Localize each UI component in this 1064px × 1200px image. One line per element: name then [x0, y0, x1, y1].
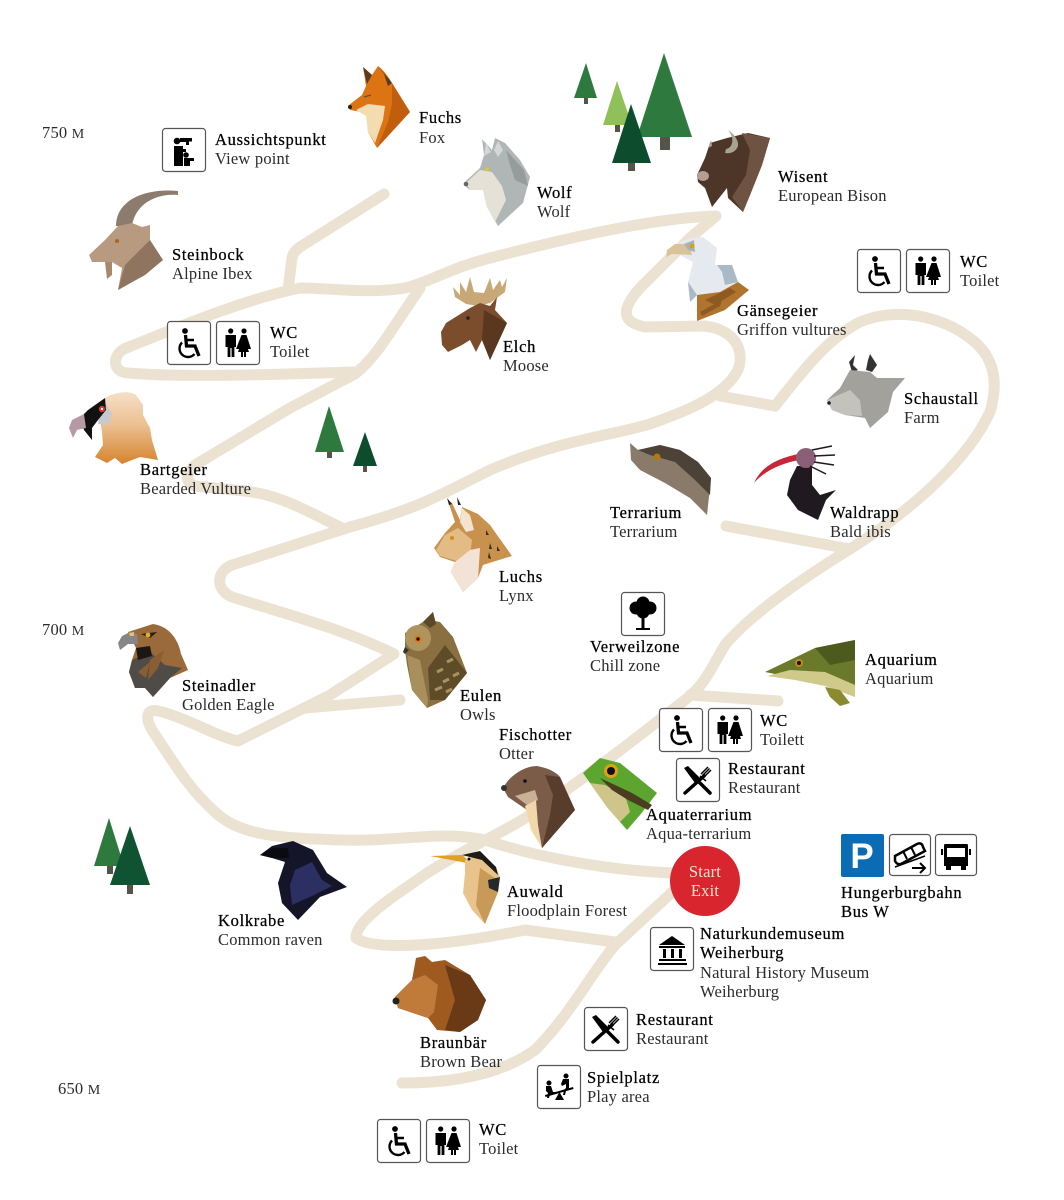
- label: Spielplatz: Spielplatz: [587, 1068, 660, 1087]
- label: WC upper left: [270, 323, 310, 361]
- label: WC middle: [760, 711, 804, 749]
- label: Steinadler: [182, 676, 275, 714]
- label: WC bottom: [479, 1120, 519, 1158]
- label: Naturkundemuseum: Natural History Museum: [700, 963, 869, 982]
- label: Wolf: Wolf: [537, 183, 572, 202]
- label: Waldrapp: Waldrapp: [830, 503, 899, 522]
- label: Luchs: Lynx: [499, 586, 534, 605]
- label: Spielplatz: [587, 1068, 660, 1106]
- label: Restaurant upper: Restaurant: [728, 759, 806, 778]
- label: Schaustall: [904, 389, 979, 427]
- label: Hungerburgbahn and bus: Bus W: [841, 902, 890, 921]
- label: Aquarium: Aquarium: [865, 669, 934, 688]
- label: WC middle: Toilett: [760, 730, 804, 749]
- label: Fuchs: [419, 108, 462, 147]
- label: Auwald: Floodplain Forest: [507, 901, 627, 920]
- label: Bartgeier: [140, 460, 251, 498]
- animal: otter: [501, 766, 575, 848]
- label: Braunbär: Brown Bear: [420, 1052, 502, 1071]
- label: Aussichtspunkt: View point: [215, 149, 290, 168]
- label: Kolkrabe: [218, 911, 323, 949]
- label: Hungerburgbahn and bus: Hungerburgbahn: [841, 883, 962, 902]
- label: WC upper left: WC: [270, 323, 298, 342]
- label: Aussichtspunkt: [215, 130, 327, 168]
- label: Elch: Moose: [503, 356, 549, 375]
- animal: bittern: [430, 851, 500, 924]
- label: Fuchs: Fox: [419, 128, 446, 147]
- label: Elch: [503, 337, 549, 375]
- animal: ibex: [89, 191, 178, 290]
- animal: bison: [697, 130, 770, 212]
- animal: griffon vulture: [666, 237, 749, 321]
- label: Naturkundemuseum: Weiherburg: [700, 943, 784, 962]
- label: Gänsegeier: [737, 301, 847, 339]
- label: Spielplatz: Play area: [587, 1087, 650, 1106]
- label: Hungerburgbahn and bus: [841, 883, 962, 921]
- label: Bartgeier: Bartgeier: [140, 460, 208, 479]
- label: WC bottom: Toilet: [479, 1139, 519, 1158]
- label: WC upper right: [960, 252, 1000, 290]
- museum icon: [650, 928, 694, 970]
- animal: viper: [630, 443, 711, 515]
- animal: raven: [260, 841, 347, 920]
- transport icons: P: [850, 837, 874, 876]
- label: Naturkundemuseum: Naturkundemuseum: [700, 924, 845, 943]
- label: Eulen: Eulen: [460, 686, 502, 705]
- label: Kolkrabe: Common raven: [218, 930, 323, 949]
- label: Naturkundemuseum: [700, 924, 869, 1001]
- restaurant icon (upper): [676, 758, 720, 802]
- label: Wisent: European Bison: [778, 186, 887, 205]
- label: Wisent: [778, 167, 887, 205]
- label: WC bottom: WC: [479, 1120, 507, 1139]
- label: Steinbock: Steinbock: [172, 245, 244, 264]
- label: Terrarium: Terrarium: [610, 522, 678, 541]
- label: Restaurant lower: [636, 1010, 714, 1048]
- chill zone icon: [622, 592, 664, 636]
- animal: lynx: [434, 497, 512, 592]
- start and exit marker: [670, 846, 740, 916]
- label: Naturkundemuseum: Weiherburg: [700, 982, 779, 1001]
- animal: bearded vulture: [69, 392, 158, 464]
- elevation labels: [42, 123, 101, 1098]
- animal: bald ibis: [754, 446, 836, 520]
- label: Elch: Elch: [503, 337, 536, 356]
- label: Steinadler: Steinadler: [182, 676, 256, 695]
- elevation labels: 700 M: [42, 620, 85, 639]
- label: Terrarium: [610, 503, 682, 541]
- animal: fox: [348, 66, 410, 148]
- label: Restaurant upper: Restaurant: [728, 778, 801, 797]
- trees: centre pair: [315, 406, 377, 472]
- label: Luchs: Luchs: [499, 567, 543, 586]
- elevation labels: 650 M: [58, 1079, 101, 1098]
- label: Waldrapp: [830, 503, 899, 541]
- label: Luchs: [499, 567, 543, 605]
- label: Eulen: Owls: [460, 705, 496, 724]
- trees: bottom-left pair: [94, 818, 150, 894]
- label: Terrarium: Terrarium: [610, 503, 682, 522]
- label: Braunbär: Braunbär: [420, 1033, 487, 1052]
- label: Fischotter: Otter: [499, 744, 534, 763]
- label: Restaurant lower: Restaurant: [636, 1010, 714, 1029]
- animal: tree frog: [583, 758, 657, 830]
- label: Gänsegeier: Griffon vultures: [737, 320, 847, 339]
- view point icon: [162, 128, 206, 172]
- label: Aquarium: [865, 650, 938, 688]
- transport icons: [841, 834, 976, 877]
- play area icon: [538, 1066, 580, 1108]
- label: Fischotter: Fischotter: [499, 725, 572, 744]
- accessible toilet icons (upper left): [168, 322, 260, 364]
- label: Bartgeier: Bearded Vulture: [140, 479, 251, 498]
- label: Wisent: Wisent: [778, 167, 828, 186]
- label: Wolf: Wolf: [537, 202, 571, 221]
- label: Auwald: Auwald: [507, 882, 563, 901]
- label: Steinbock: Alpine Ibex: [172, 264, 253, 283]
- label: Braunbär: [420, 1033, 502, 1071]
- label: Restaurant lower: Restaurant: [636, 1029, 709, 1048]
- label: WC upper right: WC: [960, 252, 988, 271]
- start and exit marker: Start: [689, 862, 721, 881]
- trees: top cluster: [574, 53, 692, 171]
- label: Aquarium: Aquarium: [865, 650, 938, 669]
- label: Verweilzone: Chill zone: [590, 656, 660, 675]
- restaurant icon (lower): [584, 1008, 628, 1050]
- label: Schaustall: Schaustall: [904, 389, 979, 408]
- label: Wolf: [537, 183, 572, 221]
- accessible toilet icons (middle): [660, 708, 752, 752]
- accessible toilet icons (upper right): [858, 250, 950, 292]
- start and exit marker: Exit: [691, 881, 719, 900]
- label: Aussichtspunkt: Aussichtspunkt: [215, 130, 327, 149]
- animal: golden eagle: [118, 624, 188, 697]
- label: Restaurant upper: [728, 759, 806, 797]
- label: WC upper right: Toilet: [960, 271, 1000, 290]
- label: Schaustall: Farm: [904, 408, 940, 427]
- label: WC upper left: Toilet: [270, 342, 310, 361]
- label: Fuchs: Fuchs: [419, 108, 462, 127]
- label: Waldrapp: Bald ibis: [830, 522, 891, 541]
- animal: eagle owl: [403, 612, 467, 708]
- label: WC middle: WC: [760, 711, 788, 730]
- animal: moose: [441, 277, 507, 360]
- label: Eulen: [460, 686, 502, 724]
- label: Fischotter: [499, 725, 572, 763]
- animal: wolf: [464, 138, 530, 226]
- label: Steinbock: [172, 245, 253, 283]
- label: Aquaterrarium: Aquaterrarium: [646, 805, 752, 824]
- label: Aquaterrarium: [646, 805, 752, 843]
- label: Kolkrabe: Kolkrabe: [218, 911, 285, 930]
- walking paths: [115, 194, 994, 1083]
- label: Verweilzone: [590, 637, 680, 675]
- label: Aquaterrarium: Aqua-terrarium: [646, 824, 751, 843]
- accessible toilet icons (bottom): [378, 1120, 470, 1162]
- label: Verweilzone: Verweilzone: [590, 637, 680, 656]
- animal: farm cow: [827, 354, 905, 428]
- label: Gänsegeier: Gänsegeier: [737, 301, 818, 320]
- label: Auwald: [507, 882, 627, 920]
- animal: brown bear: [392, 956, 486, 1032]
- label: Steinadler: Golden Eagle: [182, 695, 275, 714]
- animal: pike: [765, 640, 855, 706]
- elevation labels: 750 M: [42, 123, 85, 142]
